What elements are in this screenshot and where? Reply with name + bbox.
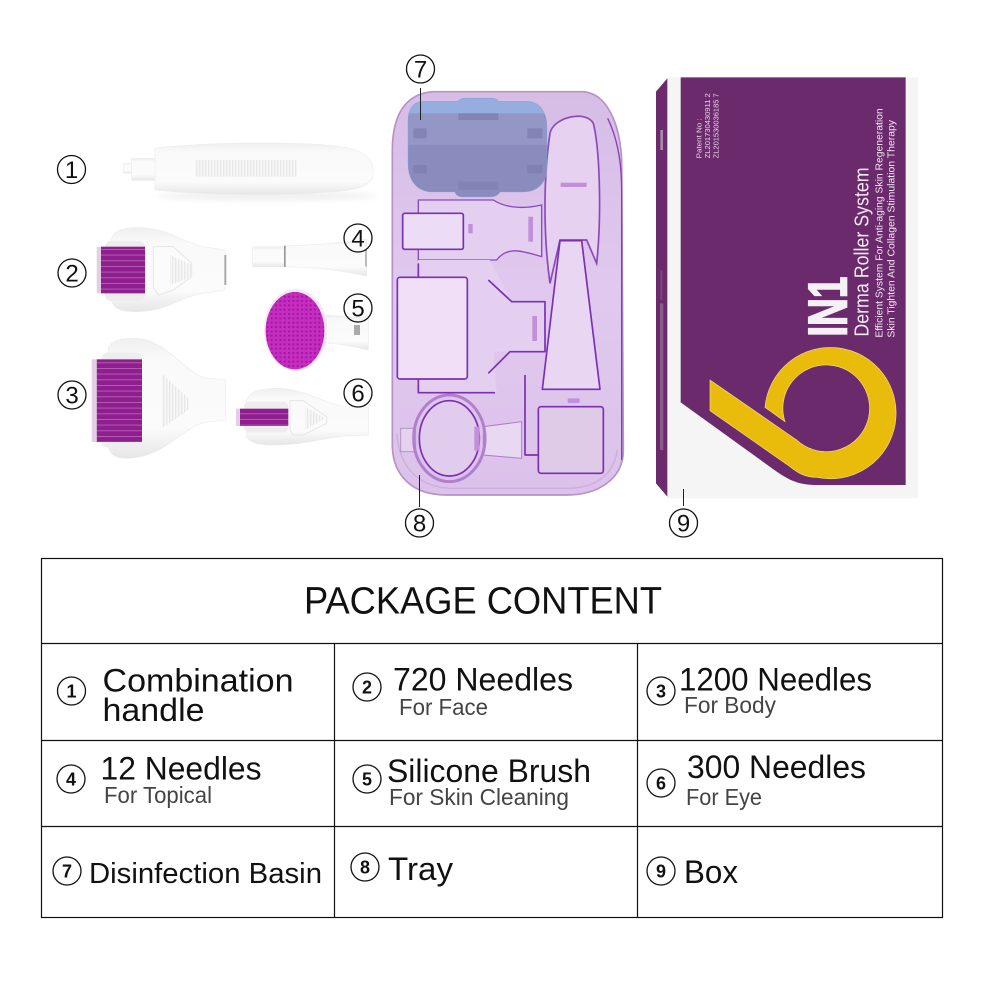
label 9 with leader <box>670 489 698 538</box>
label 1 <box>58 156 86 184</box>
label 2 <box>58 259 86 288</box>
patent numbers: ZL201730430911 2 <box>705 93 712 158</box>
table heading: PACKAGE CONTENT <box>304 580 662 622</box>
panel: accessories <box>92 143 377 458</box>
cell 4: 12 needles: For Topical <box>104 782 212 808</box>
cell 8: tray <box>351 851 453 887</box>
cell 1: combination handle: 1 <box>66 682 77 702</box>
cell 2: 720 needles: For Face <box>399 694 488 720</box>
box front <box>667 77 918 498</box>
cell 4: 12 needles <box>57 750 262 808</box>
box spine <box>656 78 667 497</box>
cell 7: disinfection basin: Disinfection Basin <box>89 858 322 890</box>
cell 2: 720 needles: 2 <box>362 678 372 698</box>
combination handle <box>123 143 377 201</box>
cell 5: silicone brush <box>353 753 591 810</box>
patent numbers <box>697 93 720 158</box>
label 2: 2 <box>65 260 79 288</box>
label 3: 3 <box>65 382 79 410</box>
cell 6: 300 needles: 6 <box>656 774 666 794</box>
cell 9: box: Box <box>684 854 738 890</box>
label 5: 5 <box>351 296 365 322</box>
tray compartments <box>397 116 622 482</box>
roller 720 needles <box>97 228 226 312</box>
silicone brush <box>264 289 368 371</box>
cell 2: 720 needles <box>353 662 573 720</box>
yellow numeral 6 <box>710 347 896 479</box>
patent numbers: Patent No : <box>697 118 704 158</box>
box title 6 in 1: IN1 <box>797 277 859 337</box>
patent numbers: ZL201530036185 7 <box>713 93 720 158</box>
label 3 <box>58 381 86 410</box>
box description line 2: Skin Tighten And Collagen Stimulation Therapy <box>886 119 897 338</box>
purple panel <box>681 77 906 485</box>
cell 8: tray: 8 <box>360 858 370 878</box>
cell 1: combination handle: Combination <box>102 662 294 698</box>
label 6: 6 <box>351 380 365 408</box>
label 4 <box>344 224 372 252</box>
label 1: 1 <box>65 157 78 184</box>
cell 6: 300 needles: 300 Needles <box>687 749 866 785</box>
cell 1: combination handle <box>58 662 294 728</box>
table grid <box>42 558 942 918</box>
cell 6: 300 needles: For Eye <box>686 784 762 810</box>
cell 3: 1200 needles: For Body <box>684 692 776 718</box>
cell 9: box <box>647 854 738 890</box>
cell 1: combination handle: handle <box>102 692 204 728</box>
cell 3: 1200 needles <box>647 662 872 718</box>
label 8 with leader <box>406 475 434 538</box>
label 6 <box>344 379 372 408</box>
cell 9: box: 9 <box>656 862 666 882</box>
topical 12 needle head <box>253 239 367 276</box>
label 4: 4 <box>351 226 365 252</box>
label 8 with leader: 8 <box>413 510 426 538</box>
panel: product box <box>656 77 918 498</box>
label 9 with leader: 9 <box>677 510 690 538</box>
cell 4: 12 needles: 4 <box>66 770 76 790</box>
label 7 with leader: 7 <box>414 56 427 84</box>
cell 5: silicone brush: For Skin Cleaning <box>389 784 569 810</box>
panel: package content table <box>42 558 942 918</box>
cell 2: 720 needles: 720 Needles <box>393 662 573 698</box>
box subtitle: Derma Roller System <box>851 167 873 337</box>
label 7 with leader <box>406 55 434 120</box>
cell 3: 1200 needles: 1200 Needles <box>679 662 872 698</box>
tray body <box>392 92 623 495</box>
panel: tray with disinfection basin <box>392 92 623 495</box>
disinfection basin <box>407 97 548 198</box>
cell 4: 12 needles: 12 Needles <box>100 750 262 786</box>
cell 3: 1200 needles: 3 <box>656 682 666 702</box>
cell 6: 300 needles <box>647 749 866 810</box>
cell 8: tray: Tray <box>388 851 453 887</box>
roller 300 needles <box>236 388 368 445</box>
label 5 <box>344 294 372 322</box>
cell 5: silicone brush: Silicone Brush <box>387 753 591 789</box>
box description line 1: Efficient System For Anti-aging Skin Regeneration <box>874 108 885 338</box>
cell 7: disinfection basin: 7 <box>62 862 72 882</box>
cell 5: silicone brush: 5 <box>362 770 372 790</box>
roller 1200 needles <box>92 338 226 458</box>
